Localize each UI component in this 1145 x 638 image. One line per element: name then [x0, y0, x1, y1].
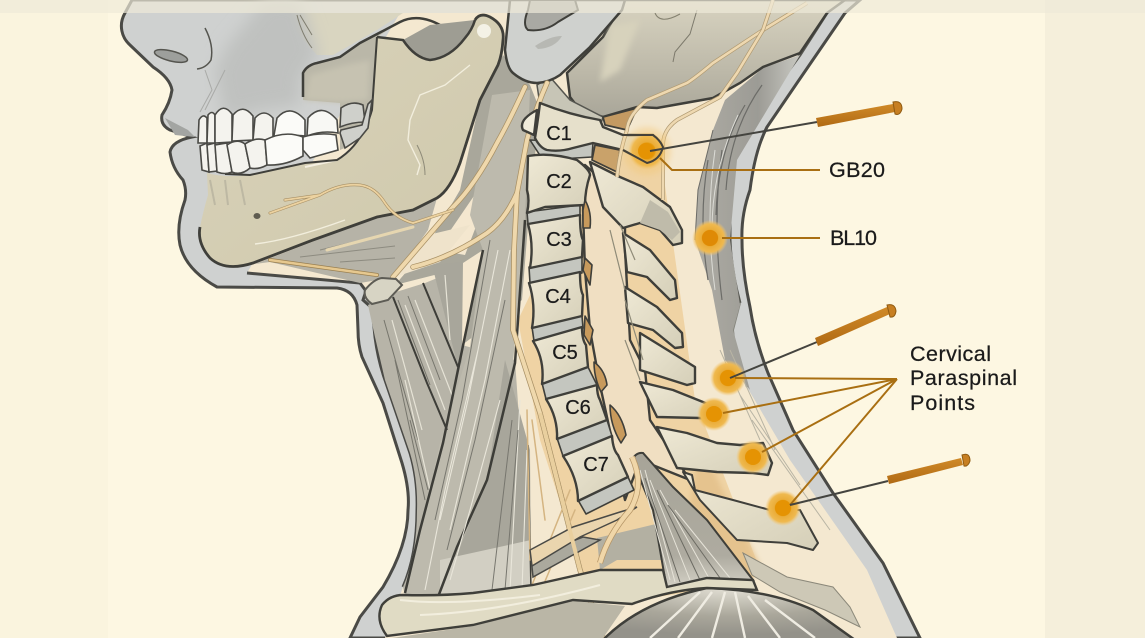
foramina [583, 200, 626, 443]
anterior neck muscles [368, 90, 531, 597]
mastoid [505, 0, 625, 83]
articular pillar [583, 165, 690, 500]
teeth [198, 100, 372, 174]
cervical vertebrae spine [522, 103, 818, 550]
spinous processes [590, 162, 818, 550]
lower back muscle wedge [743, 553, 860, 627]
vertebra labels: C4 [545, 286, 571, 308]
label: GB20: GB20 [829, 158, 885, 182]
vertebral bodies [527, 155, 628, 501]
needle: GB20 [650, 102, 902, 151]
label: Cervical Paraspinal Points: Points [910, 391, 975, 415]
vertebra labels: C7 [583, 454, 609, 476]
label: Cervical Paraspinal Points [910, 342, 1017, 415]
vertebra labels: C2 [546, 171, 572, 193]
vertebra labels [545, 123, 609, 476]
C1 [535, 103, 663, 163]
shoulder muscle [603, 588, 855, 638]
trapezius fan muscle [632, 453, 753, 590]
hyoid bone [365, 278, 402, 304]
vertebra labels: C1 [546, 123, 572, 145]
transverse facet pads [603, 108, 637, 130]
neck interior [247, 13, 897, 638]
top band [0, 0, 1145, 13]
occipital skull [567, 0, 845, 117]
lower nerve roots [600, 457, 638, 563]
back neck muscle band [695, 55, 830, 530]
peach tissue behind spine [518, 150, 762, 600]
needle: lower paraspinal [790, 454, 970, 505]
acupoints: cervical paraspinal [697, 360, 801, 526]
face skull shading [153, 0, 473, 150]
nerves [270, 83, 603, 638]
lower neck bands [530, 507, 662, 577]
soft tissue shadow [680, 443, 762, 590]
discs [527, 140, 634, 514]
panel: head and neck silhouette [121, 0, 920, 638]
mandible [199, 15, 503, 267]
vertebra labels: C5 [552, 342, 578, 364]
atlas ligament region [537, 77, 603, 127]
C1 lateral mass [522, 110, 537, 135]
lower left muscle [392, 601, 625, 638]
nerve overlay on lower neck [540, 413, 580, 570]
acupoint: BL10 [692, 220, 728, 256]
acupoint: GB20 [623, 127, 671, 175]
label: Cervical Paraspinal Points: Cervical [910, 342, 991, 366]
leader lines [660, 158, 897, 505]
upper deep neck muscles [255, 55, 540, 345]
occipital nerves [617, 0, 807, 200]
clavicle [379, 570, 757, 636]
vertebra labels: C3 [546, 229, 572, 251]
vertebra labels: C6 [565, 397, 591, 419]
label: BL10: BL10 [830, 226, 877, 250]
label: Cervical Paraspinal Points: Paraspinal [910, 366, 1017, 390]
needle: upper paraspinal [730, 305, 896, 378]
